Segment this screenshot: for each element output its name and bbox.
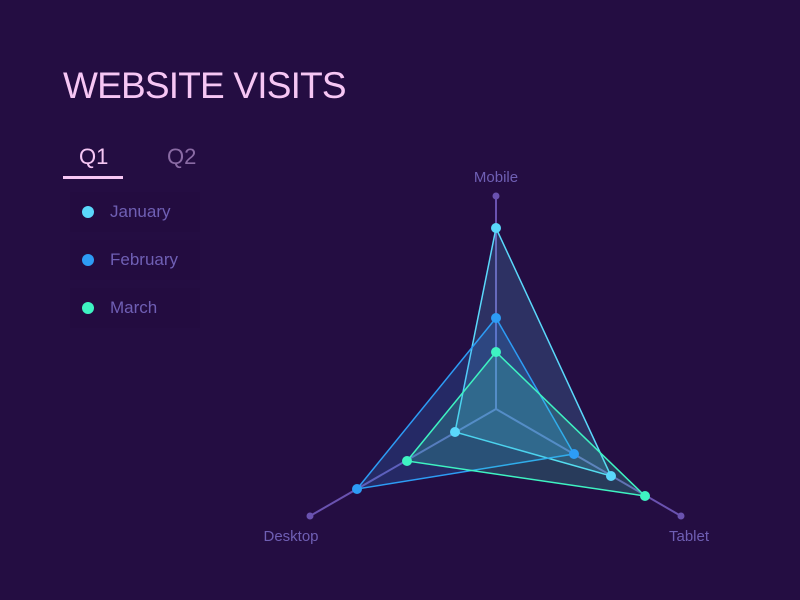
- tab: Q2: Q2: [167, 144, 196, 169]
- title: WEBSITE VISITS: [63, 65, 346, 106]
- legend: February: February: [110, 250, 178, 269]
- axis labels: Desktop: [263, 528, 319, 545]
- series: March: [407, 352, 645, 496]
- legend: February: [70, 240, 200, 280]
- legend: March: [70, 288, 200, 328]
- axis labels: [263, 169, 710, 545]
- legend: January: January: [110, 202, 170, 221]
- legend: March: March: [110, 298, 157, 317]
- tab: Q1 active: Q1: [79, 144, 108, 169]
- legend: January: [70, 192, 200, 232]
- axis labels: Mobile: [474, 169, 518, 186]
- axis labels: Tablet: [669, 528, 710, 545]
- series: January: [455, 228, 611, 476]
- data points: [352, 223, 650, 501]
- axes: [308, 194, 684, 518]
- active underline: [63, 176, 123, 179]
- tabs: [63, 144, 196, 179]
- series: February: [357, 318, 574, 489]
